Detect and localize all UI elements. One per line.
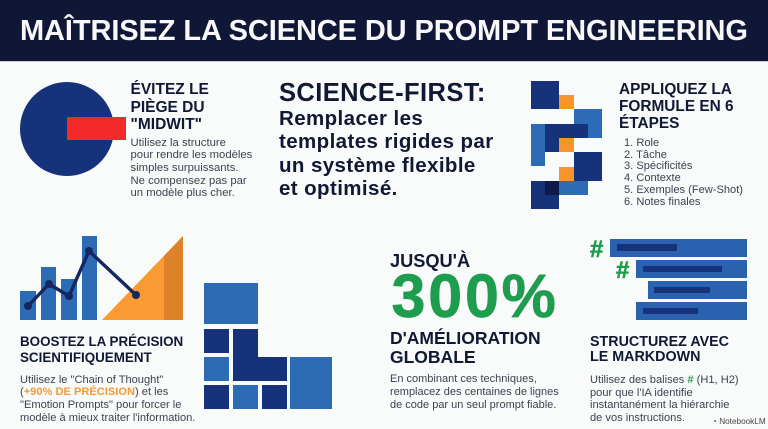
icon: circle with red bar [20,82,126,176]
precision body text: Utilisez le "Chain of Thought" [20,374,163,386]
icon: markdown hierarchy: # [616,257,629,284]
panel: 300 percent [390,250,559,411]
big stat: 300% [392,262,559,330]
midwit body text: un modèle plus cher. [130,187,235,199]
icon: block formula [531,81,602,209]
formula steps list: 4. Contexte [624,172,681,184]
panel: formula [531,81,743,209]
markdown body text: de vos instructions. [590,412,685,424]
precision heading: SCIENTIFIQUEMENT [20,350,152,364]
midwit body text: Utilisez la structure [130,136,226,148]
science-first subtitle [279,107,494,200]
midwit heading [130,80,209,133]
stat caption: GLOBALE [390,346,476,366]
precision body text: "Emotion Prompts" pour forcer le [20,399,181,411]
stat caption [390,328,541,366]
formula heading: APPLIQUEZ LA [619,81,732,98]
science-first subtitle: et optimisé. [279,177,398,200]
lead-in: JUSQU'À [390,251,470,271]
title banner [0,0,768,62]
stat body text: En combinant ces techniques, [390,373,537,385]
stat body text: remplacez des centaines de lignes [390,386,559,398]
markdown heading: STRUCTUREZ AVEC [590,334,729,350]
formula heading: FORMULE EN 6 [619,98,734,115]
science-first heading: SCIENCE-FIRST: [279,79,486,107]
formula heading [619,81,734,132]
panel: markdown [590,238,747,424]
panel: science-first [279,79,494,200]
formula steps list: 3. Spécificités [624,160,692,172]
formula heading: ÉTAPES [619,115,679,132]
midwit heading: ÉVITEZ LE [130,81,209,98]
icon: square blocks [204,283,332,409]
midwit body text: Ne compensez pas par [130,175,247,187]
precision body text [20,374,195,424]
science-first subtitle: Remplacer les [279,107,423,130]
stat body text: de code par un seul prompt fiable. [390,399,556,411]
markdown heading: LE MARKDOWN [590,349,700,365]
precision body text: (+90% DE PRÉCISION) et les [20,386,168,398]
precision heading: BOOSTEZ LA PRÉCISION [20,334,183,349]
markdown heading [590,334,729,365]
markdown body text: pour que l'IA identifie [590,387,693,399]
stat caption: D'AMÉLIORATION [390,328,541,348]
markdown body text: instantanément la hiérarchie [590,399,729,411]
formula steps list: 1. Role [624,137,659,149]
formula steps list: 2. Tâche [624,149,667,161]
chart: bars, triangle and line [20,236,183,320]
panel: precision [20,236,332,424]
precision heading [20,334,183,365]
title: MAÎTRISEZ LA SCIENCE DU PROMPT ENGINEERING [20,15,748,47]
icon: markdown hierarchy [590,238,747,320]
precision body text: modèle à mieux traiter l'information. [20,412,195,424]
midwit heading: PIÈGE DU [130,98,205,116]
panel: midwit [20,80,252,199]
midwit heading: "MIDWIT" [130,116,202,133]
markdown body text: Utilisez des balises # (H1, H2) [590,374,739,386]
midwit body text: simples surpuissants. [130,162,238,174]
stat body text [390,373,559,411]
midwit body text: pour rendre les modèles [130,149,252,161]
midwit body text [130,136,252,199]
watermark: NotebookLM: ◔ NotebookLM [712,417,766,426]
formula steps list: 6. Notes finales [624,196,700,208]
science-first subtitle: templates rigides par [279,130,494,153]
science-first subtitle: un système flexible [279,154,476,177]
markdown body text [590,374,739,424]
formula steps list: 5. Exemples (Few-Shot) [624,184,743,196]
formula steps list [624,137,743,208]
